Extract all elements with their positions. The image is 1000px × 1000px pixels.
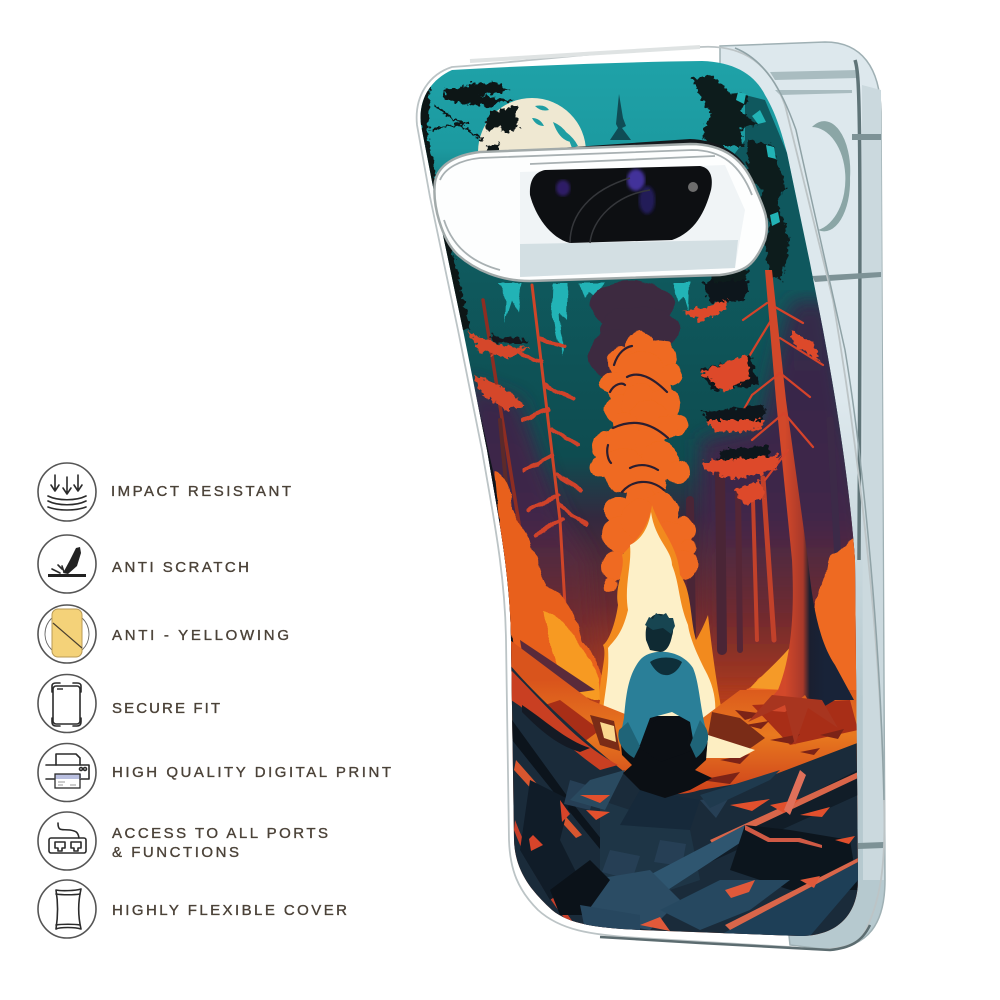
feature: anti yellowing — [38, 605, 289, 663]
purple left backdrop — [472, 376, 578, 672]
fire bush right — [745, 535, 860, 700]
fire bush left highlight — [542, 610, 600, 700]
feature: impact resistant — [38, 463, 291, 521]
feature: access to ports — [38, 812, 328, 870]
label line two: & FUNCTIONS — [112, 844, 239, 861]
purple right backdrop — [700, 300, 870, 690]
label: ACCESS TO ALL PORTS — [112, 825, 328, 842]
phone body behind the case — [720, 42, 885, 950]
right leg — [690, 720, 708, 758]
impact icon — [48, 475, 86, 510]
printed artwork panel — [410, 50, 870, 950]
label: IMPACT RESISTANT — [111, 483, 291, 500]
feature: digital print — [38, 744, 391, 802]
left leg — [618, 722, 640, 758]
hoodie — [622, 652, 706, 746]
forest sky gradient — [410, 50, 870, 950]
ground orange — [510, 640, 860, 800]
black pine top right — [692, 76, 790, 290]
hoodie shadow — [640, 716, 694, 762]
flexible case icon — [56, 889, 81, 929]
feature: secure fit — [38, 674, 220, 732]
bar rim highlights — [440, 150, 752, 270]
ports icon — [49, 823, 86, 853]
distant trunks — [483, 285, 838, 650]
cyan flecks right pine — [736, 92, 780, 226]
yellow phone icon — [52, 609, 82, 657]
pale phone body visible through bar — [520, 165, 745, 277]
label: ANTI - YELLOWING — [112, 627, 289, 644]
left edge shadow — [476, 394, 514, 672]
label: ANTI SCRATCH — [112, 559, 249, 576]
smoke accents — [607, 346, 668, 492]
big right tree — [684, 270, 854, 745]
flame outer — [599, 506, 720, 708]
debris highlights — [511, 670, 858, 936]
feature: flexible cover — [38, 880, 347, 938]
bar lower band — [520, 240, 738, 277]
clear case outline — [417, 47, 884, 950]
tree roots — [748, 695, 826, 745]
seated man — [618, 613, 712, 798]
flame inner — [604, 512, 716, 718]
feature list — [38, 463, 391, 938]
strike line — [53, 623, 82, 648]
tree red needles — [684, 300, 820, 505]
purple ground slope — [520, 640, 595, 695]
man lower body — [620, 716, 712, 798]
lens reflections — [556, 169, 698, 243]
printer icon — [46, 754, 89, 788]
feature: anti scratch — [38, 535, 249, 593]
dark teal behind right pine — [734, 95, 815, 288]
label: HIGHLY FLEXIBLE COVER — [112, 902, 347, 919]
moon — [478, 98, 586, 151]
left pine branches — [516, 340, 587, 535]
left edge branches — [468, 332, 530, 410]
orange smoke column — [590, 332, 698, 595]
smoke purple — [589, 281, 680, 381]
label: SECURE FIT — [112, 700, 220, 717]
head — [646, 614, 673, 652]
hair — [645, 613, 675, 634]
camera bar cutout — [434, 139, 767, 281]
distant dark pine — [610, 94, 631, 140]
label: HIGH QUALITY DIGITAL PRINT — [112, 764, 391, 781]
cyan foliage drips — [498, 283, 690, 357]
black pine top left — [417, 82, 520, 330]
tree black foliage — [700, 280, 770, 465]
tree trunk — [760, 270, 854, 712]
tree branches — [735, 303, 823, 480]
fire bush right highlight — [750, 648, 789, 690]
ground red shadows — [530, 700, 858, 784]
hood opening — [650, 658, 682, 675]
burning logs — [590, 712, 765, 758]
case icon — [52, 683, 81, 726]
shadow above bar — [530, 139, 745, 165]
fire bush left — [494, 470, 606, 700]
dark debris ground — [500, 665, 860, 945]
camera lens — [530, 166, 712, 243]
scratch icon — [48, 547, 86, 577]
